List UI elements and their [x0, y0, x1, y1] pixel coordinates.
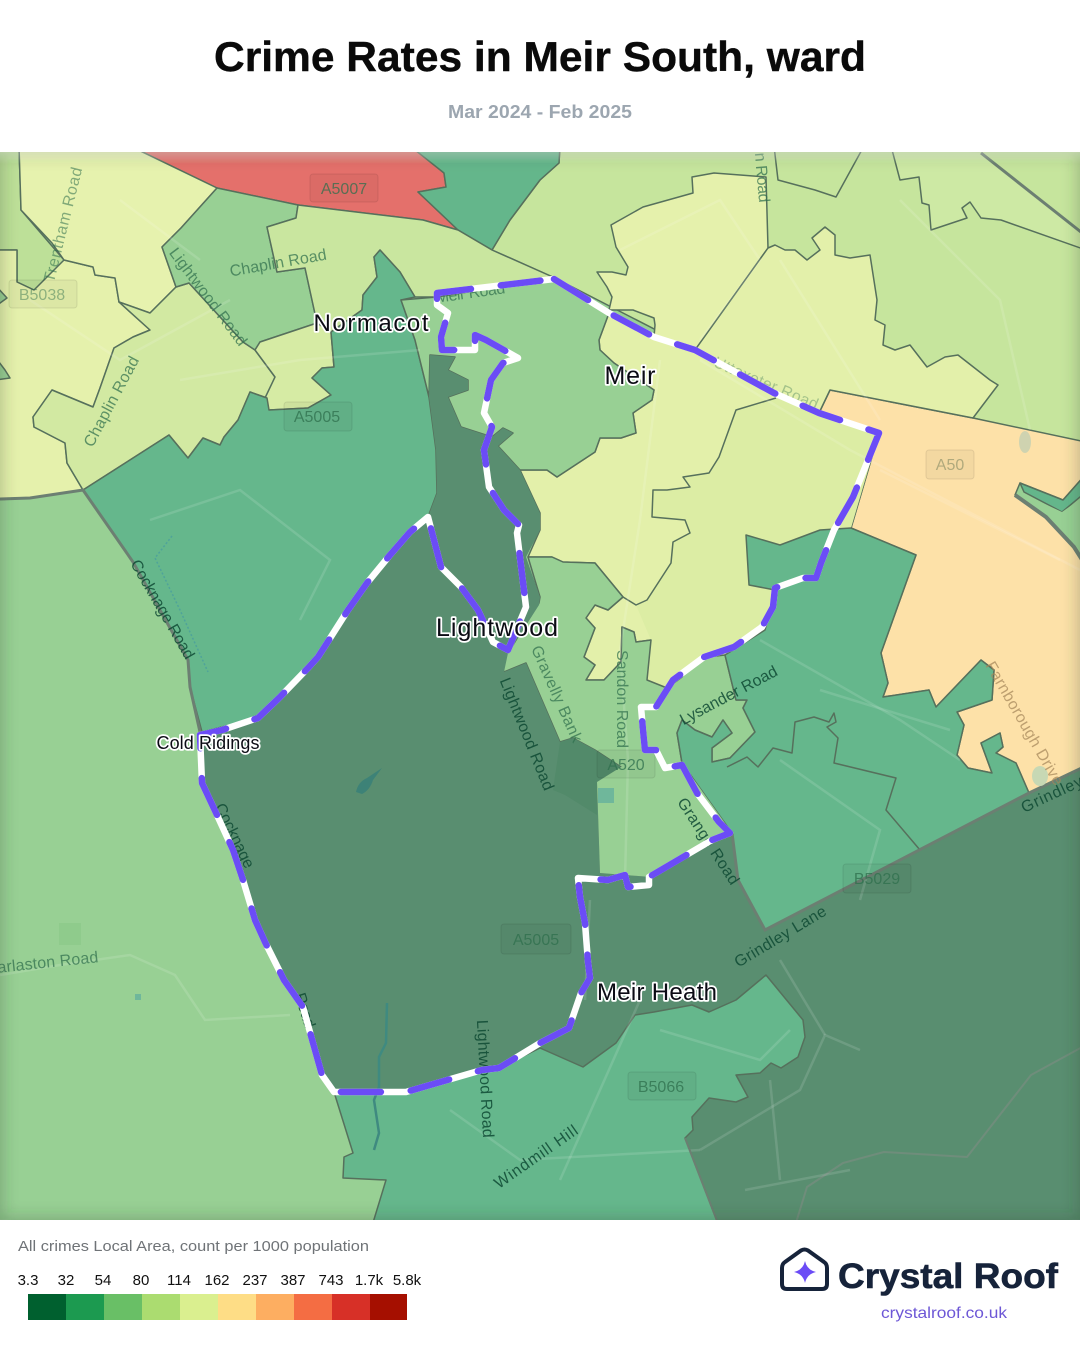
- slightly greener east Meir: [648, 463, 870, 686]
- legend tick labels: 1.7k: [355, 1272, 384, 1289]
- dark green ward and south area: [200, 397, 1080, 1226]
- Lightwood: Lightwood: [436, 614, 558, 642]
- water features: [59, 431, 1048, 1150]
- light green north of ward: [401, 278, 654, 477]
- legend tick labels: 387: [280, 1272, 306, 1289]
- subtitle: date range: Mar 2024 - Feb 2025: [448, 102, 632, 122]
- road labels: [0, 152, 1080, 1192]
- internal east boundary: [727, 713, 920, 850]
- boundary purple dashes: [200, 279, 879, 1092]
- choropleth map panel: [0, 146, 1080, 1226]
- red area: [144, 152, 456, 228]
- shield B5038: B5038: [19, 287, 65, 304]
- south east boundary line: [795, 1045, 1080, 1226]
- top left lime: [0, 146, 64, 290]
- Chaplin Road lime: [267, 205, 555, 332]
- legend tick labels: 80: [133, 1272, 149, 1289]
- lake: [356, 768, 382, 794]
- small left green patches: [0, 289, 8, 304]
- Farnborough Drive: Farnborough Drive: [982, 659, 1066, 789]
- Crystal Roof logo: [782, 1250, 1058, 1322]
- west lime: [33, 283, 275, 490]
- top right lime area: [492, 146, 1080, 446]
- grey pond: [1019, 431, 1031, 453]
- left pale yellow: [0, 250, 150, 500]
- medium green north patch: [410, 146, 560, 250]
- west stream: [155, 536, 208, 672]
- Cocknage fragment under boundary: Cocknage: [211, 801, 257, 871]
- Grange Road: Grange Road: [673, 795, 742, 888]
- place labels: [156, 310, 717, 1006]
- Meir internal boundary: [623, 398, 776, 605]
- Windmill Hill: Windmill Hill: [491, 1122, 581, 1192]
- stream: [374, 1003, 387, 1150]
- crime rate areas: [0, 146, 1080, 1226]
- top edge light fade: [0, 152, 1080, 164]
- faint road network: [0, 200, 1080, 1190]
- Lysander Road: Lysander Road: [677, 663, 781, 729]
- Cocknage Road north: Cocknage Road: [127, 557, 197, 662]
- small pond: [135, 994, 141, 1000]
- partial road name: n Road: [751, 152, 772, 203]
- legend tick labels: 743: [318, 1272, 344, 1289]
- Meir Heath: Meir Heath: [597, 979, 717, 1006]
- Lightwood Road north: Lightwood Road: [165, 245, 250, 350]
- legend tick labels: 3.3: [18, 1272, 38, 1289]
- shield A5005 north: [284, 402, 352, 431]
- shield B5029: B5029: [854, 871, 900, 888]
- shield B5066: [628, 1072, 696, 1100]
- Meir Road: Meir Road: [435, 280, 506, 307]
- shield A5005 north: A5005: [294, 409, 340, 426]
- Road fragment under boundary: Road: [291, 991, 318, 1030]
- teal square: [598, 788, 614, 803]
- light green Gravelly Bank area: [493, 557, 755, 877]
- shield A5005 south: [501, 924, 571, 954]
- shield B5029: [843, 864, 911, 893]
- Chaplin Road west: Chaplin Road: [81, 354, 143, 450]
- boundary white line: [200, 279, 879, 1092]
- Lightwood Road south: Lightwood Road: [473, 1019, 496, 1138]
- shield A5007: A5007: [321, 181, 367, 198]
- ward boundary: [200, 279, 879, 1092]
- Normacot: Normacot: [314, 310, 429, 337]
- legend tick labels: 5.8k: [393, 1272, 422, 1289]
- corner green wedge: [1019, 480, 1080, 512]
- orange area: [819, 390, 1080, 793]
- legend tick labels: [18, 1272, 422, 1289]
- field patch: [59, 923, 81, 945]
- map edge vignette: [0, 146, 1080, 1226]
- darker patch by A520: [553, 738, 621, 815]
- Lightwood Road central: Lightwood Road: [496, 675, 557, 793]
- website: crystalroof.co.uk: [881, 1305, 1008, 1322]
- shield A5007: [310, 174, 378, 202]
- shield A50: [926, 450, 974, 479]
- legend tick labels: 32: [58, 1272, 74, 1289]
- large medium green west: [83, 250, 437, 732]
- medium green east: [677, 528, 1029, 930]
- pale yellow east of ward: [695, 227, 998, 418]
- legend caption: All crimes Local Area, count per 1000 population: [18, 1238, 369, 1255]
- shield A50: A50: [936, 457, 964, 474]
- Meir: Meir: [604, 362, 656, 390]
- Gravelly Bank: Gravelly Bank: [527, 643, 585, 746]
- Trentham Road: Trentham Road: [41, 166, 86, 284]
- Sandon Road: Sandon Road: [613, 650, 630, 748]
- top left pale yellow: [19, 146, 217, 313]
- legend tick labels: 162: [204, 1272, 230, 1289]
- shield B5038: [9, 280, 77, 308]
- legend tick labels: 54: [95, 1272, 111, 1289]
- title: Crime Rates in Meir South, ward: [214, 33, 866, 80]
- shield A520: [597, 750, 655, 778]
- medium green south: [334, 975, 805, 1226]
- pale yellow north of ward: [597, 173, 768, 350]
- pale yellow central Meir: [520, 313, 879, 688]
- brand name: Crystal Roof: [838, 1257, 1058, 1296]
- legend: [18, 1238, 422, 1320]
- small lime: [255, 323, 334, 410]
- Uttoxeter Road: Uttoxeter Road: [711, 354, 821, 414]
- road shields: [9, 174, 974, 1100]
- shield B5066: B5066: [638, 1079, 684, 1096]
- Grindley Lane: Grindley Lane: [732, 903, 830, 971]
- legend colour scale: [28, 1294, 407, 1320]
- icon: house with star: [782, 1250, 827, 1289]
- shield A5005 south: A5005: [513, 932, 559, 949]
- thick boundary roads: [0, 153, 1080, 1226]
- legend tick labels: 237: [242, 1272, 268, 1289]
- legend tick labels: 114: [167, 1272, 191, 1289]
- dark strip top: [429, 355, 468, 397]
- Chaplin Road north: Chaplin Road: [228, 247, 328, 280]
- shield A520: A520: [607, 757, 645, 774]
- Cold Ridings: Cold Ridings: [156, 733, 260, 753]
- light green Lightwood Road area: [162, 188, 317, 350]
